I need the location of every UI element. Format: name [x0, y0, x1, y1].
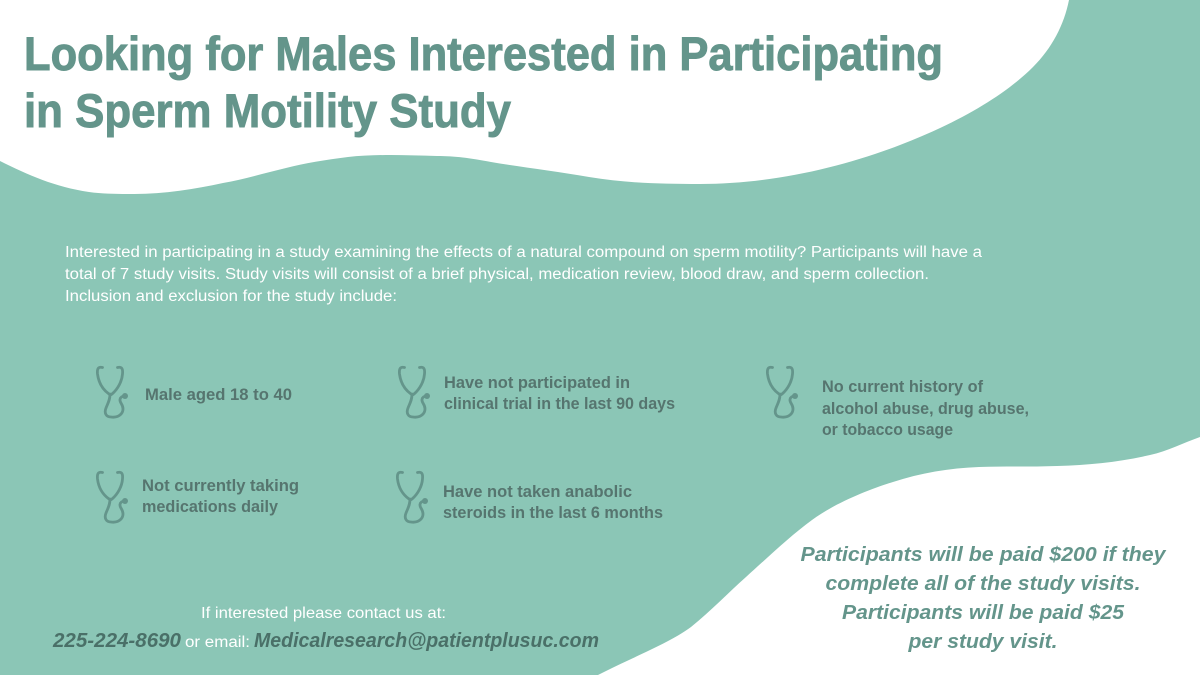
contact block: Medicalresearch@patientplusuc.com [254, 630, 599, 652]
criterion: age [97, 367, 292, 417]
criterion: medications: Not currently taking [142, 477, 299, 495]
payment callout [800, 543, 1167, 653]
payment callout: complete all of the study visits. [826, 572, 1140, 595]
payment callout: Participants will be paid $200 if they [800, 543, 1167, 566]
criterion: medications: medications daily [142, 498, 279, 516]
criterion: clinical trial: Have not participated in [444, 374, 630, 392]
icon: stethoscope [767, 367, 798, 417]
criterion: substance history: No current history of [822, 378, 983, 396]
intro paragraph: Interested in participating in a study examining the effects of a natural compound on sperm motility? Participants will have a [65, 244, 982, 261]
contact block [52, 605, 599, 652]
intro paragraph [65, 244, 982, 305]
payment callout: Participants will be paid $25 [842, 601, 1125, 624]
criterion: steroids: Have not taken anabolic [443, 483, 632, 501]
criterion: clinical trial: clinical trial in the last 90 days [444, 395, 675, 413]
criterion: substance history [767, 367, 1029, 439]
intro paragraph: total of 7 study visits. Study visits will consist of a brief physical, medication review, blood draw, and sperm collection. [65, 266, 929, 283]
contact block: 225-224-8690 [52, 630, 181, 652]
criterion: substance history: or tobacco usage [822, 421, 953, 439]
title: in Sperm Motility Study [24, 84, 511, 137]
criterion: substance history: alcohol abuse, drug abuse, [822, 400, 1029, 418]
title [24, 27, 943, 137]
top white wave [0, 0, 1069, 194]
criterion: steroids [397, 472, 663, 522]
icon: stethoscope [97, 367, 128, 417]
intro paragraph: Inclusion and exclusion for the study include: [65, 288, 397, 305]
criterion: clinical trial [399, 367, 675, 417]
icon: stethoscope [397, 472, 428, 522]
bottom right white wave [598, 437, 1200, 675]
contact block: or email: [185, 634, 250, 651]
icon: stethoscope [97, 472, 128, 522]
criterion: steroids: steroids in the last 6 months [443, 504, 663, 522]
contact block: If interested please contact us at: [201, 605, 446, 622]
criterion: medications [97, 472, 299, 522]
criterion: age: Male aged 18 to 40 [145, 386, 292, 404]
payment callout: per study visit. [907, 630, 1058, 653]
title: Looking for Males Interested in Participating [24, 27, 943, 80]
icon: stethoscope [399, 367, 430, 417]
